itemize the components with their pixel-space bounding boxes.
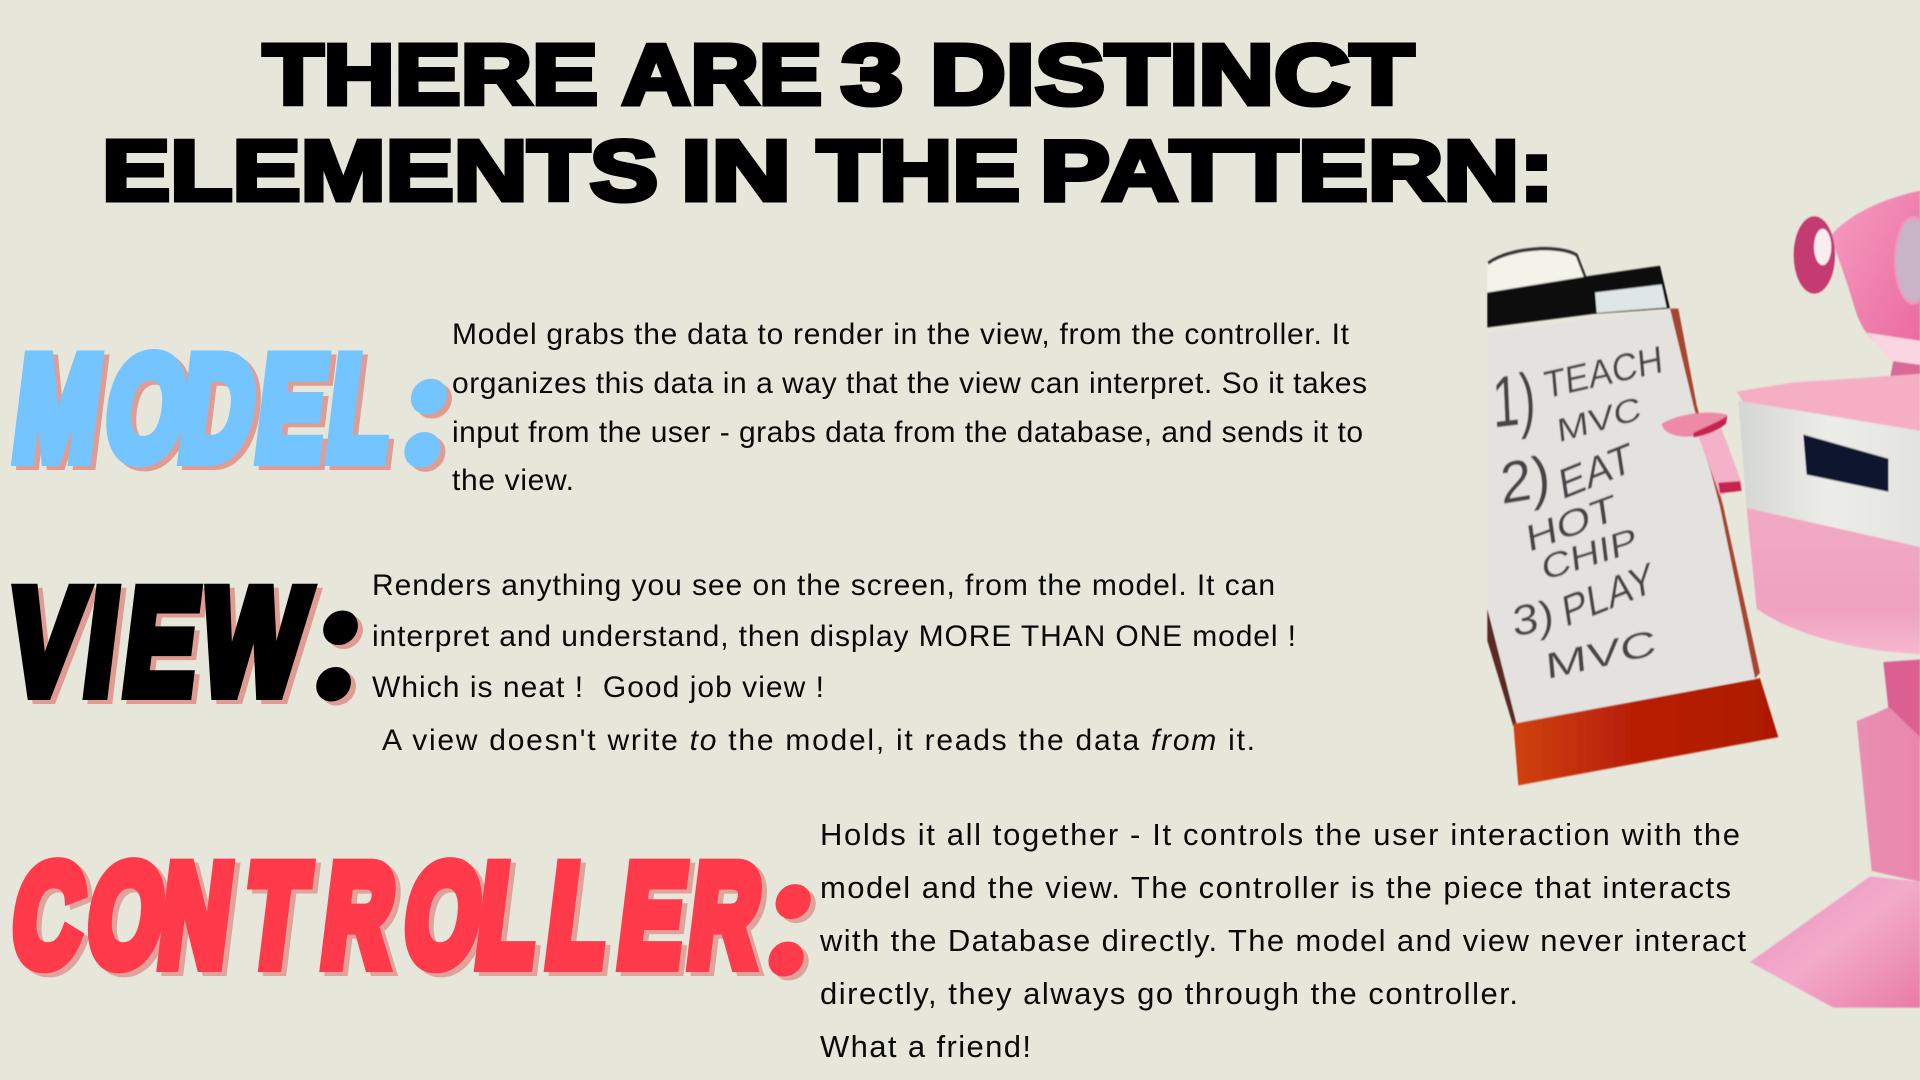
title: THE (817, 124, 1020, 219)
title: DISTINCT (930, 28, 1414, 123)
handwriting: HOT (1524, 486, 1619, 561)
text block: controller description: Holds it all together - It controls the user interaction with the (820, 817, 1740, 852)
handwriting: 1) (1490, 357, 1537, 443)
title: 3 (841, 28, 903, 123)
title: ARE (622, 28, 822, 123)
handwriting: EAT (1556, 433, 1636, 509)
handwriting: 3) (1511, 591, 1555, 646)
text block: controller description: directly, they always go through the controller. (820, 976, 1518, 1011)
text block: model description: input from the user - grabs data from the database, and sends it to (452, 416, 1363, 449)
text block: model description: the view. (452, 464, 574, 497)
icon: clipboard (1487, 246, 1778, 785)
text block: view description: Renders anything you see on the screen, from the model. It can (372, 569, 1275, 602)
handwriting: MVC (1555, 389, 1643, 450)
illustration: pink robot holding a clipboard (1487, 191, 1920, 1008)
text block: view description: Which is neat ! Good job view ! (372, 671, 824, 704)
text block: controller description: with the Database directly. The model and view never interact (819, 923, 1746, 958)
heading: MODEL: : (389, 315, 467, 498)
text block: model description: Model grabs the data to render in the view, from the controller. It (452, 318, 1350, 351)
heading: CONTROLLER: : (751, 812, 835, 1010)
heading: MODEL: MODEL (6, 326, 401, 490)
handwriting: CHIP (1540, 520, 1639, 589)
title: IN (681, 124, 791, 219)
title: THERE (263, 28, 598, 123)
icon: robot (1662, 191, 1920, 1008)
handwriting: 2) (1498, 444, 1552, 517)
text block: view description: A view doesn't write to the model, it reads the data from it. (382, 724, 1255, 757)
handwriting (1490, 337, 1665, 688)
title: PATTERN: (1040, 124, 1554, 219)
title: ELEMENTS (102, 124, 658, 219)
text block: view description: interpret and understand, then display MORE THAN ONE model ! (372, 620, 1296, 653)
handwriting: TEACH (1542, 337, 1665, 407)
title (102, 28, 1554, 219)
handwriting: MVC (1544, 623, 1658, 688)
heading: CONTROLLER: CONTROLLER (5, 835, 769, 995)
text block: controller description: model and the view. The controller is the piece that interacts (820, 870, 1731, 905)
text block: view description (372, 569, 1296, 757)
handwriting: PLAY (1559, 553, 1657, 637)
text block: controller description (819, 817, 1746, 1064)
text block: model description: organizes this data in a way that the view can interpret. So it takes (452, 367, 1367, 400)
text block: model description (452, 318, 1367, 497)
heading: VIEW: VIEW (0, 558, 315, 725)
text block: controller description: What a friend! (820, 1029, 1031, 1064)
heading: VIEW: : (299, 541, 381, 735)
